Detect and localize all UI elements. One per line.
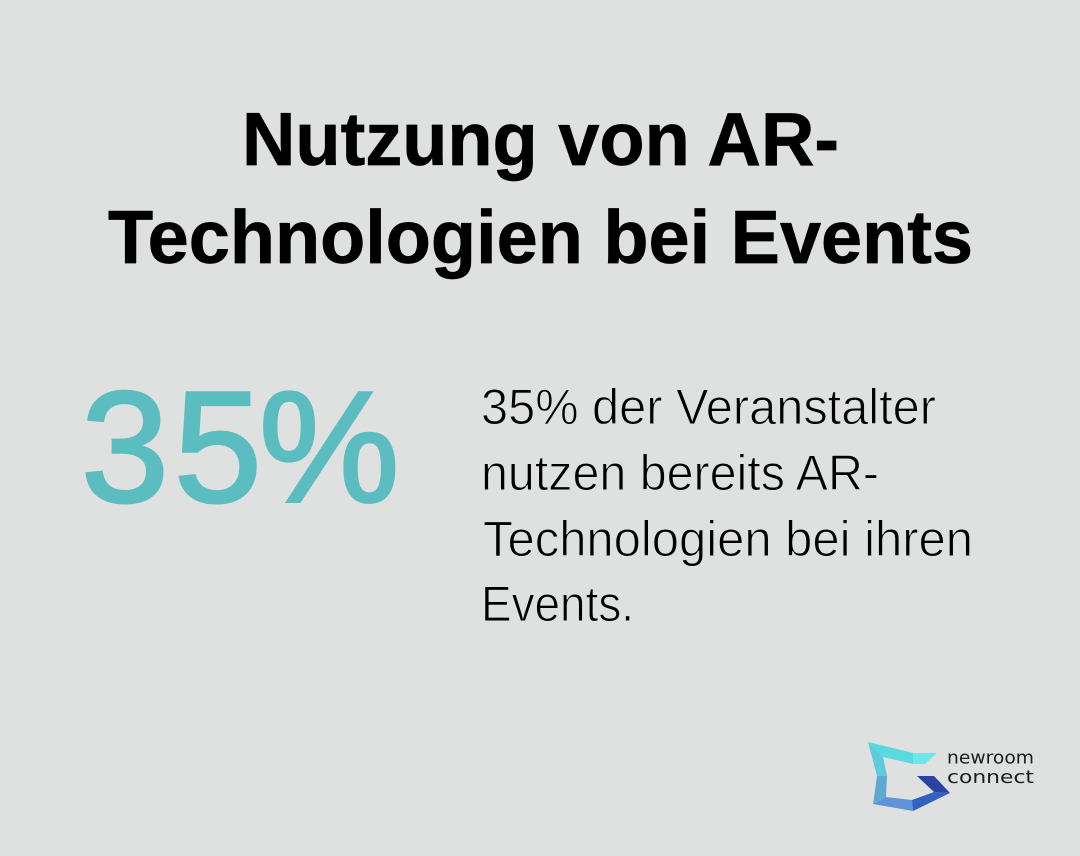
logo wordmark: newroom — [947, 748, 1034, 768]
icon: logo mark — [868, 742, 950, 811]
description text: Technologien bei ihren — [483, 511, 973, 567]
title: Technologien bei Events — [108, 195, 973, 279]
big statistic: 35%: 35% — [81, 360, 400, 536]
title — [108, 97, 973, 279]
logo wordmark: connect — [947, 768, 1034, 788]
logo: newroom connect — [868, 742, 1034, 811]
title: Nutzung von AR- — [242, 97, 839, 181]
description text: 35% der Veranstalter — [481, 379, 936, 435]
description text: Events. — [481, 576, 634, 632]
description text: nutzen bereits AR- — [481, 445, 879, 501]
description text — [481, 379, 973, 632]
logo wordmark — [947, 748, 1034, 788]
